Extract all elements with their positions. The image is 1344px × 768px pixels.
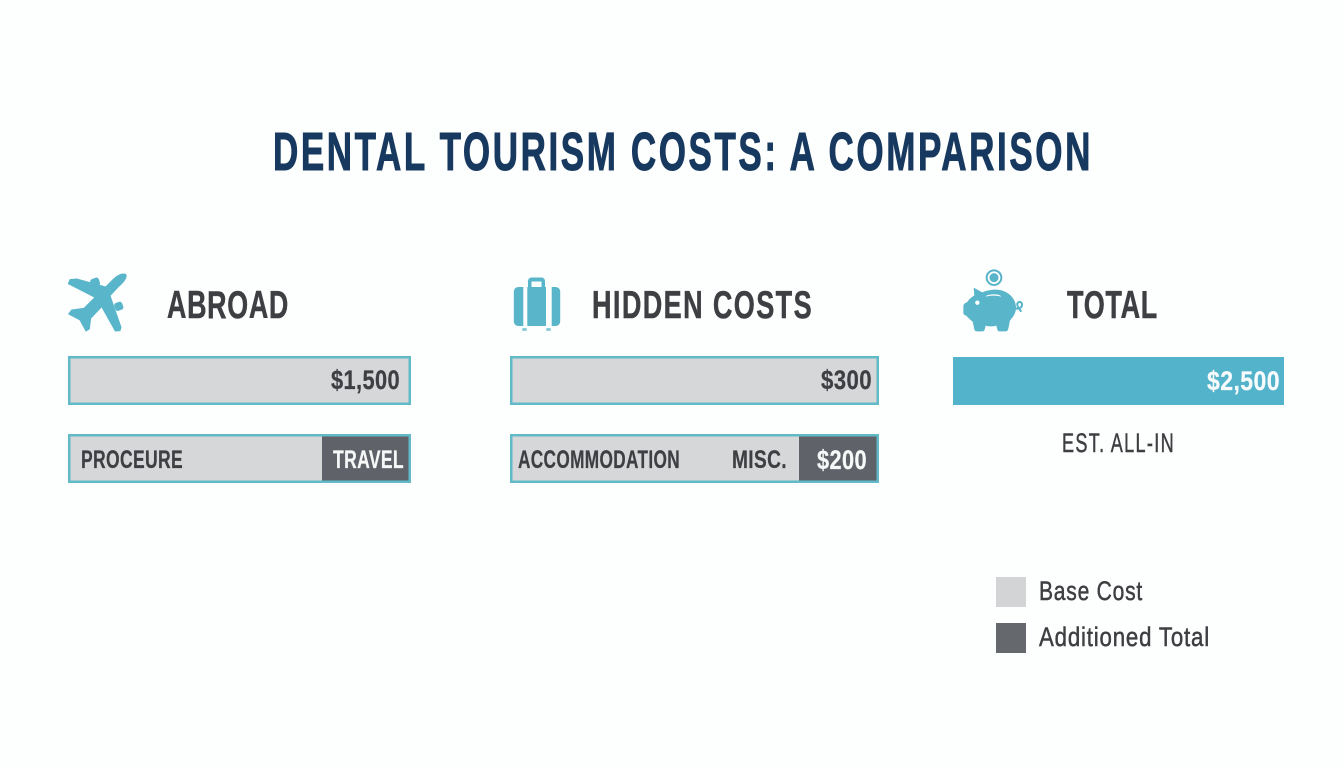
bar: abroad base cost: $1,500 xyxy=(331,365,400,395)
panel: total xyxy=(953,270,1284,458)
icon: suitcase xyxy=(514,278,560,331)
bar: accommodation and misc xyxy=(511,435,878,482)
heading: hidden costs: HIDDEN COSTS xyxy=(592,284,813,327)
legend item: additioned total: Additioned Total xyxy=(1039,622,1210,652)
heading: total: TOTAL xyxy=(1067,284,1158,327)
bar: accommodation and misc: MISC. xyxy=(732,446,787,474)
bar: abroad base cost xyxy=(69,357,410,404)
panel: hidden costs xyxy=(511,278,878,482)
legend xyxy=(996,576,1210,653)
bar: hidden costs base: $300 xyxy=(821,365,872,395)
bar: total xyxy=(953,357,1284,405)
legend item: additioned total xyxy=(996,622,1210,653)
bar: hidden costs base xyxy=(511,357,878,404)
bar: procedure and travel: TRAVEL xyxy=(333,446,404,474)
legend item: base cost xyxy=(996,576,1143,607)
label: estimated all-in: EST. ALL-IN xyxy=(1062,428,1175,458)
bar: procedure and travel xyxy=(69,435,410,482)
legend item: base cost: Base Cost xyxy=(1039,576,1143,606)
bar: accommodation and misc: ACCOMMODATION xyxy=(518,446,680,474)
icon: piggy bank with coin xyxy=(963,270,1022,331)
panel: abroad xyxy=(68,274,410,482)
heading: abroad: ABROAD xyxy=(167,284,289,327)
bar: total: $2,500 xyxy=(1207,366,1280,396)
bar: accommodation and misc: $200 xyxy=(817,445,867,475)
bar: procedure and travel: PROCEURE xyxy=(81,446,183,474)
icon: airplane xyxy=(68,274,126,331)
